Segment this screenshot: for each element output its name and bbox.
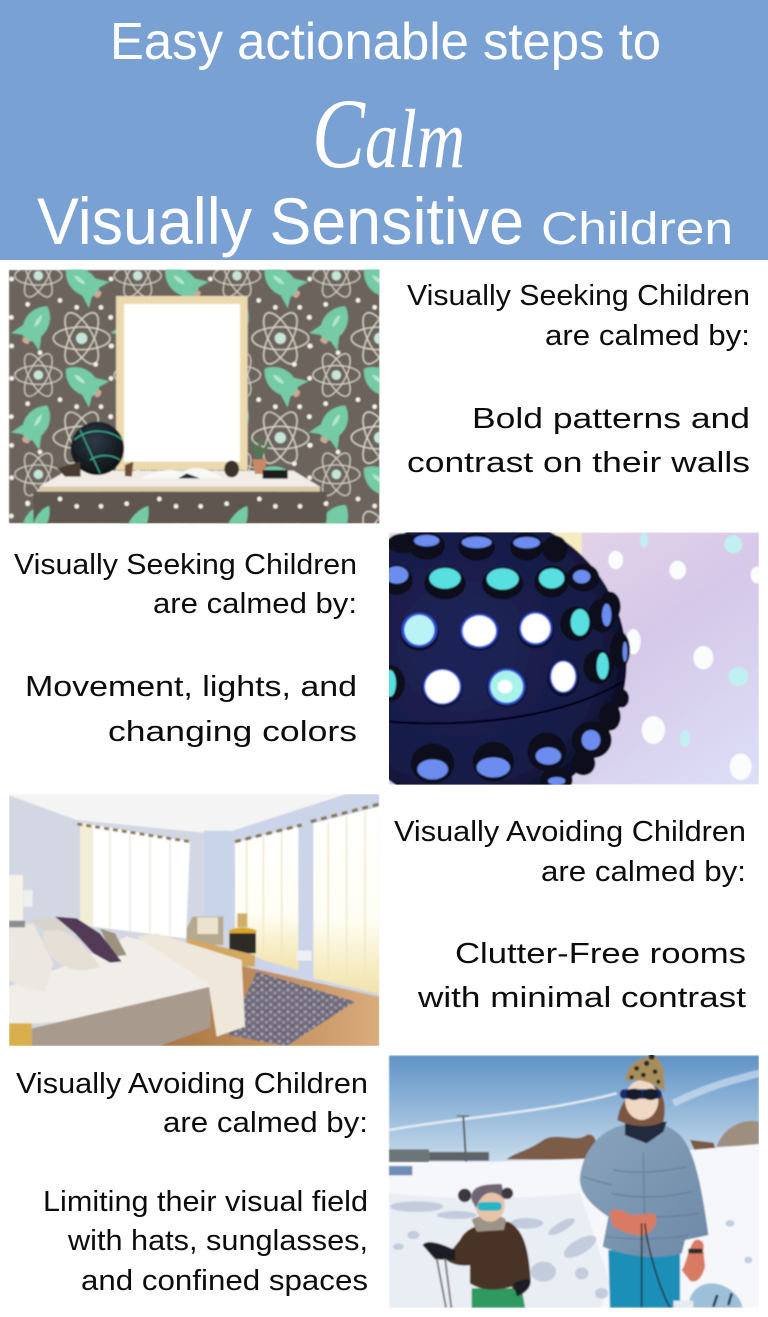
text block: limiting visual field: are calmed by: — [163, 1107, 368, 1139]
text block: clutter-free rooms: Visually Avoiding Children — [394, 816, 746, 848]
text block: bold patterns: Visually Seeking Children — [407, 280, 750, 312]
text block: bold patterns: are calmed by: — [545, 320, 750, 352]
header banner — [0, 0, 768, 260]
text block: movement and lights: changing colors — [108, 716, 357, 748]
text block: movement and lights — [14, 549, 357, 748]
text block: bold patterns — [407, 280, 750, 479]
text block: limiting visual field: with hats, sunglasses, — [67, 1225, 368, 1257]
title word: Children: Children — [541, 203, 733, 254]
text block: bold patterns: Bold patterns and — [472, 403, 750, 435]
text block: movement and lights: Visually Seeking Children — [14, 549, 357, 581]
text block: clutter-free rooms: Clutter-Free rooms — [455, 938, 746, 970]
text block: bold patterns: contrast on their walls — [407, 447, 750, 479]
photo: disco light ball — [389, 532, 759, 785]
text block: limiting visual field: Visually Avoiding Children — [16, 1068, 368, 1100]
text block: movement and lights: are calmed by: — [153, 588, 357, 620]
photo: children in snow wearing hats and sunglasses — [389, 1054, 759, 1308]
text block: limiting visual field: Limiting their visual field — [43, 1186, 368, 1218]
text block: limiting visual field — [16, 1068, 368, 1297]
text block: limiting visual field: and confined spaces — [81, 1265, 368, 1297]
photo: minimal bedroom — [9, 794, 379, 1046]
title script word: Calm: Calm — [312, 78, 465, 189]
text block: clutter-free rooms: with minimal contrast — [417, 982, 746, 1014]
text block: movement and lights: Movement, lights, and — [25, 671, 357, 703]
photo: patterned wallpaper with frame and shelf — [8, 270, 380, 524]
text block: clutter-free rooms: are calmed by: — [541, 856, 746, 888]
title line: Easy actionable steps to: Easy actionable steps to — [110, 13, 661, 71]
title line: Visually Sensitive: Visually Sensitive — [37, 184, 524, 258]
text block: clutter-free rooms — [394, 816, 746, 1014]
